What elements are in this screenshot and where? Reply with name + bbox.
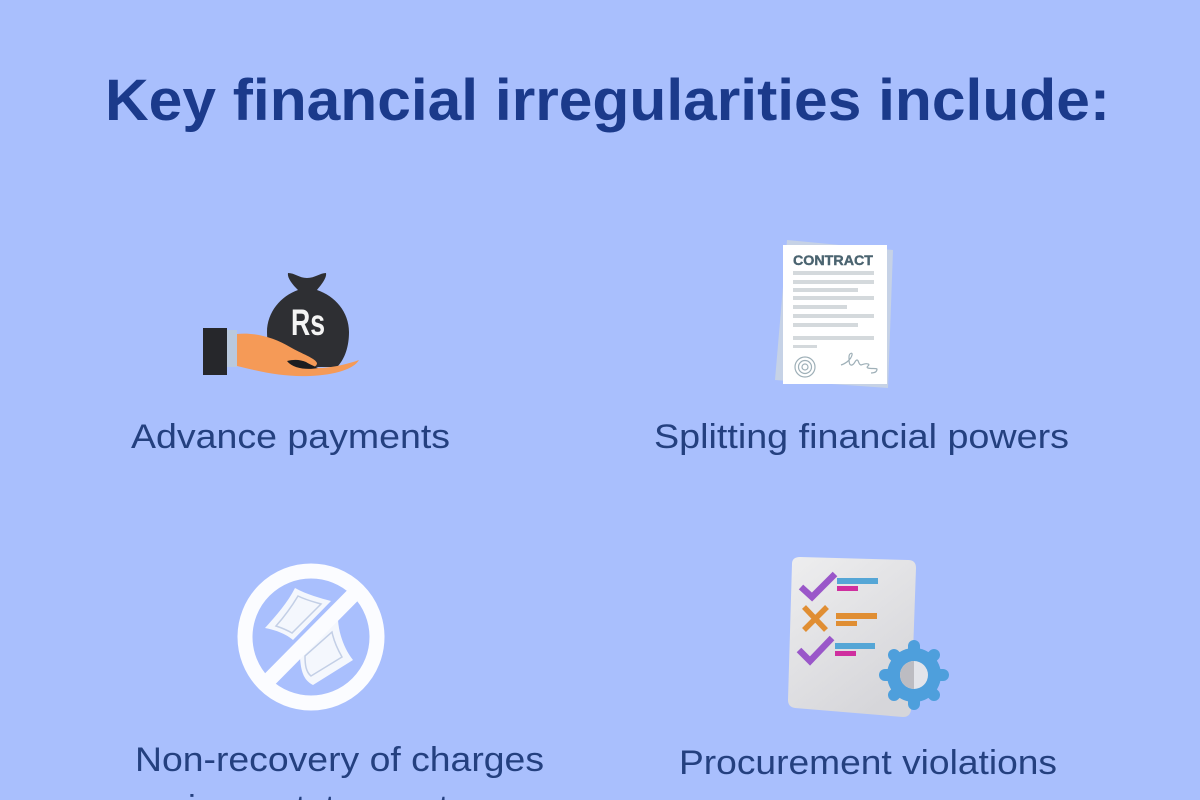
label: non-recovery of charges: Non-recovery of charges (135, 741, 544, 779)
panel: splitting financial powers (654, 240, 1069, 456)
icon: crossed-out banknotes (245, 571, 377, 703)
icon: checklist with gear (788, 557, 943, 717)
label: advance payments: Advance payments (131, 418, 450, 456)
icon: contract document: CONTRACT (793, 252, 873, 268)
label: splitting financial powers: Splitting financial powers (654, 418, 1069, 456)
panel: non-recovery of charges (135, 571, 544, 800)
icon: hand holding money bag (203, 273, 359, 376)
icon: contract document (775, 240, 893, 388)
panel: advance payments (131, 273, 450, 456)
title: Key financial irregularities include: (105, 68, 1110, 133)
label: procurement violations: Procurement violations (679, 744, 1057, 782)
icon: hand holding money bag: Rs (291, 302, 325, 343)
panel: procurement violations (679, 557, 1057, 782)
